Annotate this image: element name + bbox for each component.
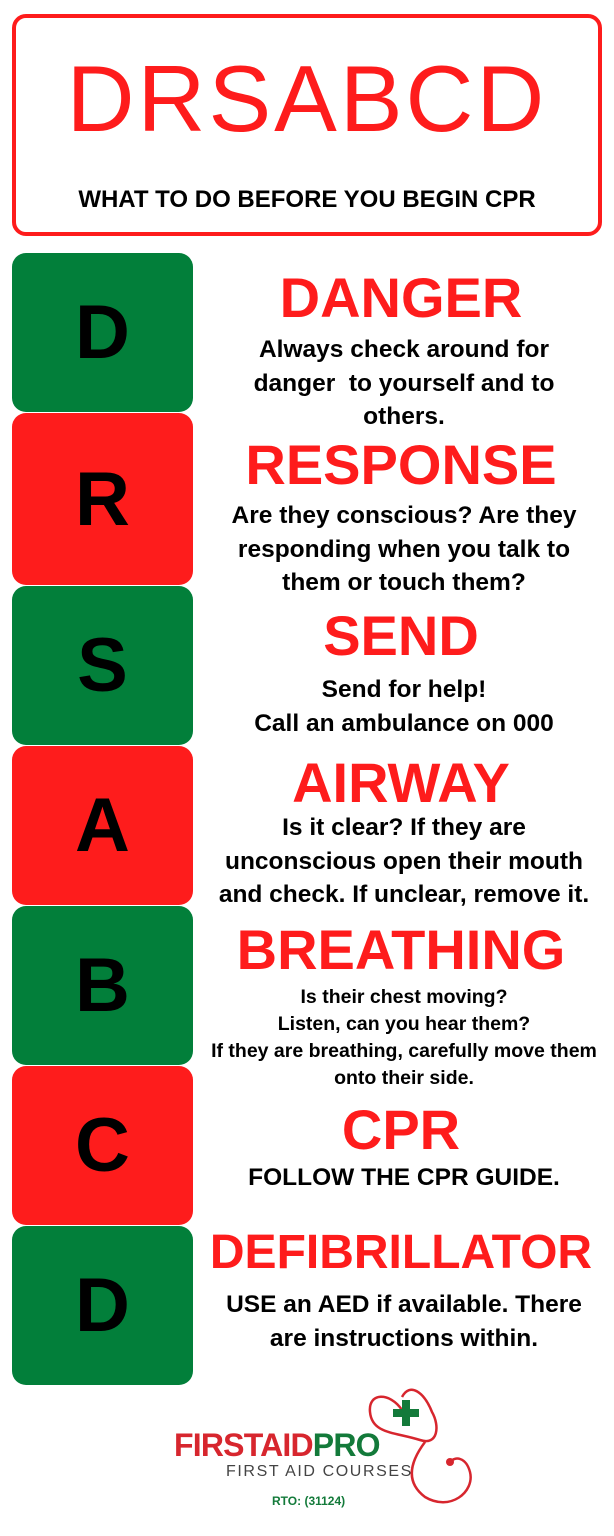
text defibrillator: are instructions within. — [270, 1324, 538, 1352]
heading danger: DANGER — [280, 266, 522, 329]
title: DRSABCD — [67, 46, 547, 151]
letter A — [12, 746, 193, 905]
subtitle: WHAT TO DO BEFORE YOU BEGIN CPR — [78, 186, 536, 213]
text danger — [254, 336, 554, 430]
text breathing: Is their chest moving? — [301, 986, 507, 1008]
letter D — [12, 253, 193, 412]
text breathing: onto their side. — [334, 1067, 474, 1089]
letter B: B — [75, 943, 130, 1028]
text airway: Is it clear? If they are — [282, 814, 526, 841]
letter A: A — [75, 783, 130, 868]
text send — [254, 676, 554, 736]
text airway: and check. If unclear, remove it. — [219, 881, 589, 908]
text breathing: Listen, can you hear them? — [278, 1013, 530, 1035]
letter S — [12, 586, 193, 745]
rto: RTO: (31124) — [272, 1494, 345, 1508]
letter C: C — [75, 1103, 130, 1188]
text airway — [219, 814, 589, 908]
text response: them or touch them? — [282, 569, 526, 596]
heading defibrillator: DEFIBRILLATOR — [210, 1226, 592, 1279]
text breathing — [211, 986, 597, 1089]
heading response: RESPONSE — [245, 433, 557, 496]
text defibrillator — [226, 1291, 582, 1352]
heading airway: AIRWAY — [292, 751, 510, 814]
text danger: others. — [363, 403, 445, 430]
title box — [12, 14, 602, 236]
heading cpr: CPR — [342, 1098, 460, 1161]
letter R — [12, 413, 193, 585]
text defibrillator: USE an AED if available. There — [226, 1291, 582, 1318]
text airway: unconscious open their mouth — [225, 848, 583, 874]
letter R: R — [75, 456, 130, 542]
icon: heart stethoscope — [368, 1388, 472, 1504]
text cpr: FOLLOW THE CPR GUIDE. — [248, 1164, 560, 1191]
heading breathing: BREATHING — [237, 918, 565, 981]
logo — [174, 1388, 472, 1508]
text response — [232, 502, 576, 596]
tagline: FIRST AID COURSES — [226, 1463, 413, 1480]
brand name: FIRSTAIDPRO — [174, 1427, 380, 1463]
text send: Call an ambulance on 000 — [254, 710, 554, 736]
text breathing: If they are breathing, carefully move them — [211, 1040, 597, 1062]
letter D: D — [75, 290, 130, 375]
text response: Are they conscious? Are they — [232, 502, 576, 529]
text danger: Always check around for — [259, 336, 549, 363]
text send: Send for help! — [322, 676, 486, 703]
letter D2: D — [75, 1263, 130, 1348]
heading send: SEND — [323, 604, 479, 667]
text response: responding when you talk to — [238, 536, 570, 562]
letter C — [12, 1066, 193, 1225]
letter B — [12, 906, 193, 1065]
text danger: danger to yourself and to — [254, 370, 554, 396]
letter D2 — [12, 1226, 193, 1385]
letter S: S — [77, 623, 128, 708]
